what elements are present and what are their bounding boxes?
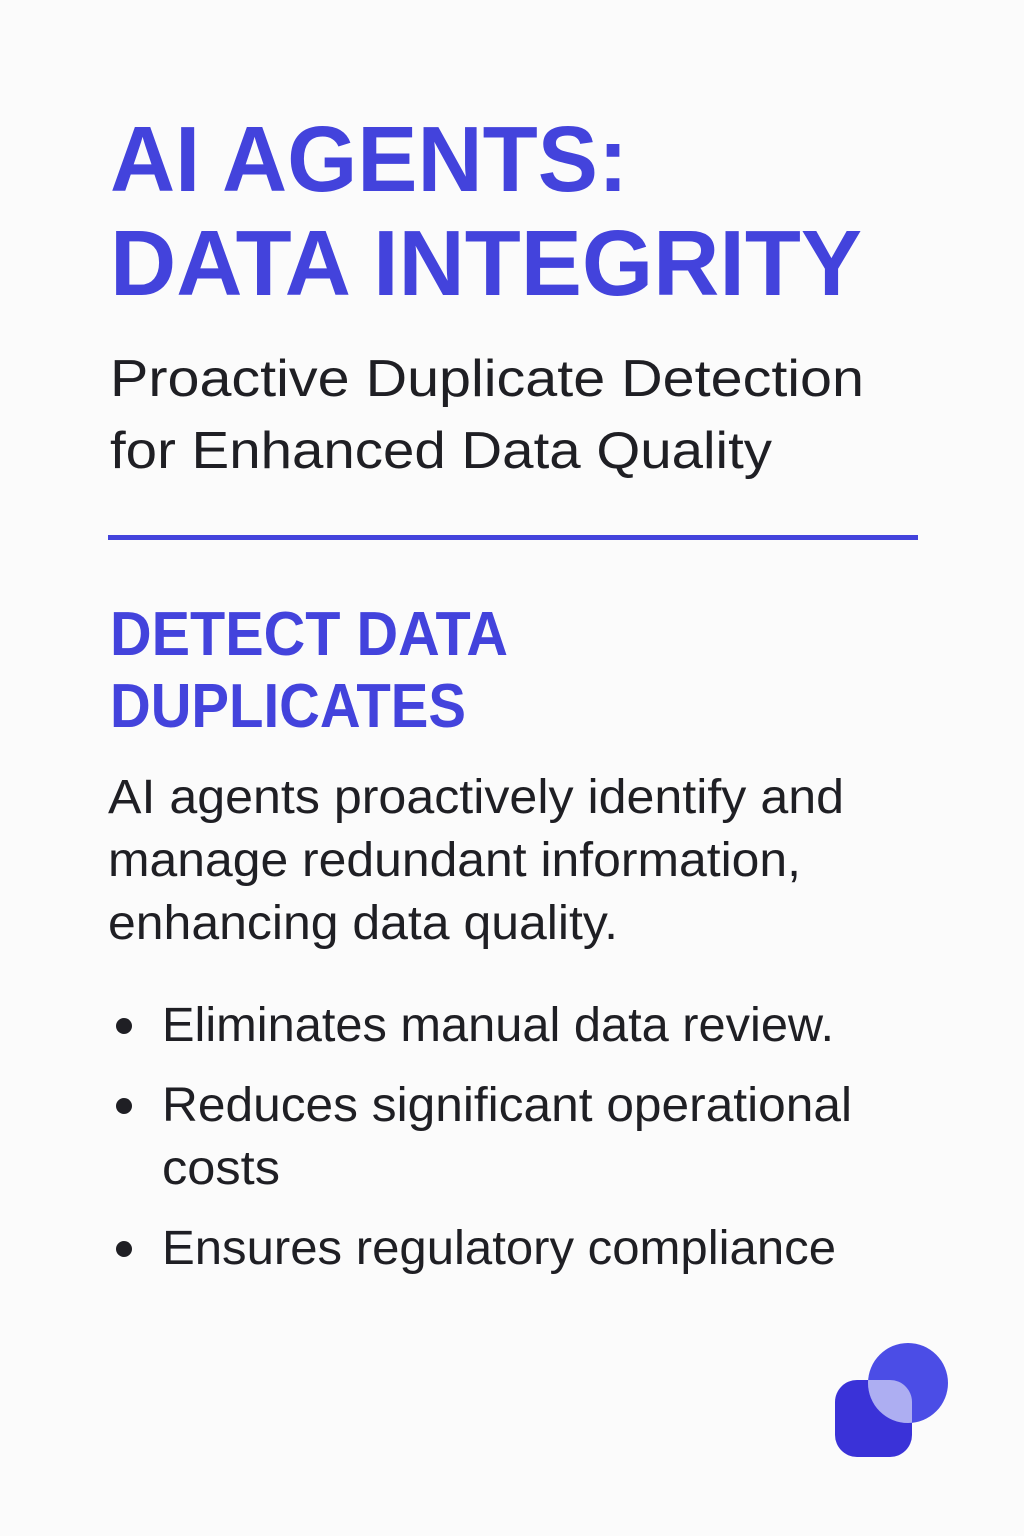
body text: enhancing data quality. (108, 897, 618, 950)
body text (108, 771, 844, 950)
body text: manage redundant information, (108, 834, 801, 887)
subtitle: Proactive Duplicate Detection (110, 350, 864, 408)
bullet list (116, 999, 852, 1275)
subtitle: for Enhanced Data Quality (110, 422, 772, 480)
section heading: DETECT DATA (110, 600, 508, 669)
subtitle (110, 350, 864, 480)
icon: logo (835, 1343, 948, 1457)
bullet list: costs (162, 1142, 280, 1195)
section heading: DUPLICATES (110, 672, 466, 741)
section heading (110, 600, 508, 741)
bullet list: Ensures regulatory compliance (162, 1222, 836, 1275)
bullet list: Reduces significant operational (162, 1079, 852, 1132)
title: AI AGENTS: (110, 107, 628, 211)
title (110, 107, 862, 315)
divider line (108, 535, 918, 540)
bullet list: Eliminates manual data review. (162, 999, 834, 1052)
body text: AI agents proactively identify and (108, 771, 844, 824)
title: DATA INTEGRITY (110, 211, 862, 315)
